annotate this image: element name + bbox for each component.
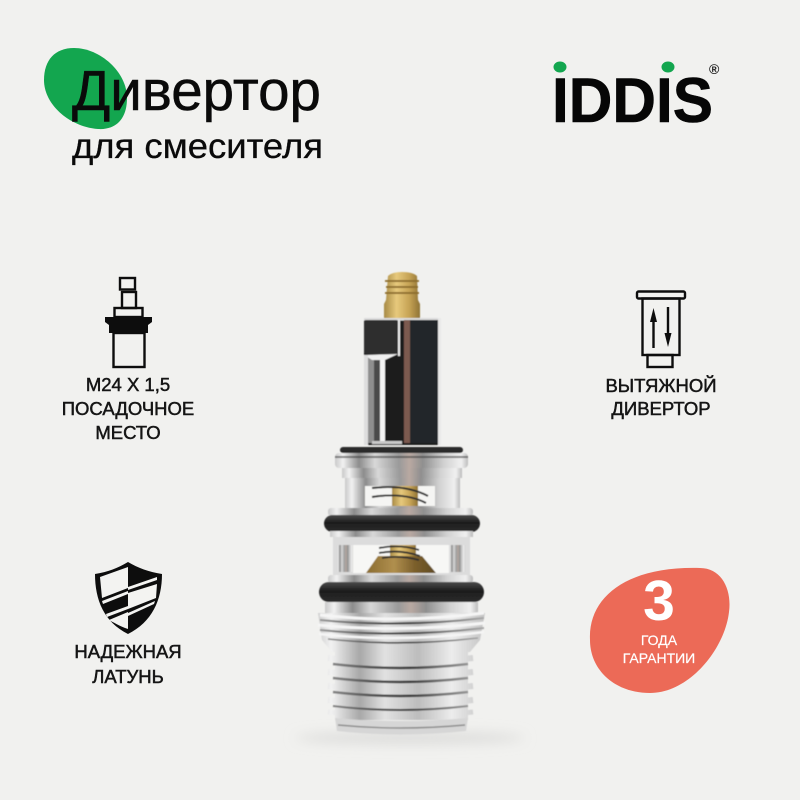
- label: M24 x 1,5: МЕСТО: [95, 422, 161, 443]
- logo: IDDIS: [552, 61, 720, 136]
- upper o-ring: [324, 508, 480, 537]
- product photo: diverter cartridge: [318, 272, 485, 734]
- icon: shield: [95, 562, 162, 634]
- feature: reliable brass: [74, 562, 182, 687]
- icon: diverter with arrows: [637, 292, 685, 367]
- floor shadow: [295, 732, 525, 744]
- label: M24 x 1,5: ПОСАДОЧНОЕ: [62, 398, 194, 419]
- warranty text: ГАРАНТИИ: [623, 650, 695, 666]
- lower cage with brass cone: [333, 537, 470, 576]
- warranty text: ГОДА: [641, 632, 678, 648]
- feature: pull-out diverter: [605, 292, 717, 419]
- title block: [44, 48, 323, 166]
- brass threaded tip: [384, 272, 420, 318]
- subheading: для смесителя: [72, 127, 323, 166]
- coral blob: [590, 568, 730, 693]
- logo wordmark: IDDIS: [552, 66, 713, 136]
- threaded body: [318, 602, 485, 734]
- label: reliable brass: ЛАТУНЬ: [92, 666, 164, 687]
- lower o-ring: [319, 575, 484, 602]
- feature: mounting size: [62, 278, 194, 443]
- upper flange: [335, 447, 468, 478]
- label: reliable brass: НАДЕЖНАЯ: [74, 641, 182, 662]
- label: pull-out diverter: ВЫТЯЖНОЙ: [605, 375, 717, 396]
- number 3: 3: [643, 569, 675, 633]
- green blob: [44, 48, 127, 129]
- registered mark: ®: [709, 61, 720, 77]
- logo dots: [554, 62, 674, 72]
- heading: Дивертор: [72, 59, 321, 123]
- icon: cartridge seat: [105, 278, 152, 367]
- warranty badge: [590, 568, 730, 693]
- upper cage with spring: [345, 478, 460, 508]
- hex stem: [364, 318, 441, 445]
- label: M24 x 1,5: М24 Х 1,5: [86, 374, 170, 395]
- label: pull-out diverter: ДИВЕРТОР: [611, 398, 711, 419]
